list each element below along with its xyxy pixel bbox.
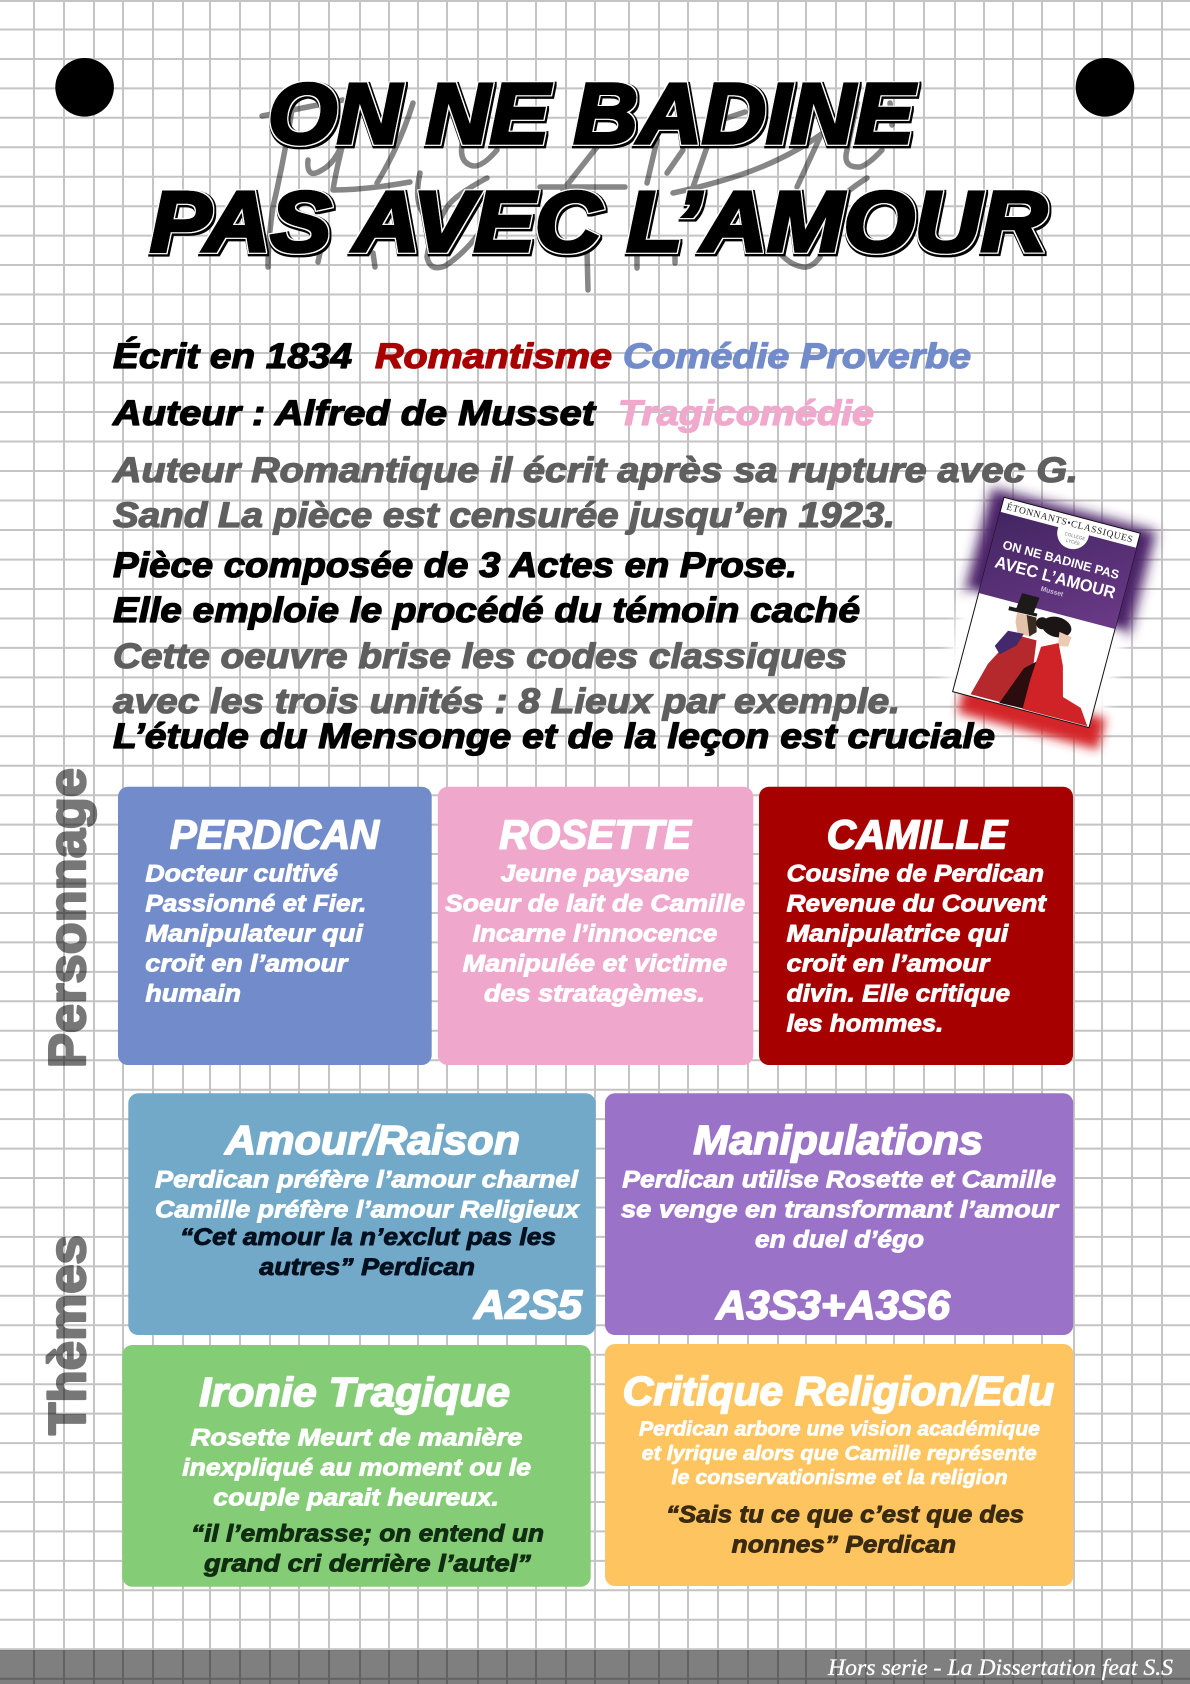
classical codes text: Cette oeuvre brise les codes classiques <box>113 637 847 676</box>
description <box>639 1419 1040 1489</box>
book cover image: ON NE BADINE PAS <box>1001 538 1121 582</box>
info text block <box>112 337 1078 756</box>
quote: grand cri derrière l’autel” <box>203 1551 531 1578</box>
heading: Ironie Tragique <box>199 1369 510 1415</box>
description: Soeur de lait de Camille <box>445 891 745 918</box>
description <box>621 1166 1060 1253</box>
book cover image: COLLÈGE <box>1064 530 1086 541</box>
title: PAS AVEC L’AMOUR <box>150 175 1047 270</box>
description: des stratagèmes. <box>484 981 705 1008</box>
description: Docteur cultivé <box>145 861 338 888</box>
description: Manipulée et victime <box>463 951 727 978</box>
description: Jeune paysane <box>501 861 689 888</box>
description: Incarne l’innocence <box>473 921 717 948</box>
description: croit en l’amour <box>787 951 991 978</box>
book cover image <box>934 488 1156 750</box>
footer band <box>0 1650 1190 1684</box>
date and movement line: Romantisme <box>375 337 612 376</box>
structure text: Pièce composée de 3 Actes en Prose. <box>113 546 797 585</box>
description: Passionné et Fier. <box>145 891 366 918</box>
heading: PERDICAN <box>170 811 380 857</box>
panel: Amour/Raison <box>128 1093 596 1335</box>
description: Camille préfère l’amour Religieux <box>155 1196 581 1223</box>
icon: right binder hole <box>1076 58 1134 117</box>
description: Perdican préfère l’amour charnel <box>155 1166 580 1193</box>
quote: autres” Perdican <box>259 1254 475 1281</box>
classical codes text: avec les trois unités : 8 Lieux par exemple. <box>113 682 900 721</box>
description: le conservationisme et la religion <box>672 1467 1008 1489</box>
author and genre line: Auteur : Alfred de Musset <box>112 394 597 433</box>
book cover image: Musset <box>1040 586 1064 599</box>
classical codes text <box>113 637 900 721</box>
description: couple parait heureux. <box>213 1485 499 1512</box>
quote: “Cet amour la n’exclut pas les <box>180 1224 556 1251</box>
quote: nonnes” Perdican <box>732 1532 956 1559</box>
icon: left binder hole <box>55 58 114 117</box>
author and genre line: Tragicomédie <box>618 394 874 433</box>
description: inexpliqué au moment ou le <box>182 1455 531 1482</box>
panel: Critique Religion/Edu <box>605 1344 1073 1586</box>
biography text: Sand La pièce est censurée jusqu’en 1923. <box>113 496 895 535</box>
description: Cousine de Perdican <box>787 861 1044 888</box>
footer credit: Hors serie - La Dissertation feat S.S <box>827 1655 1174 1680</box>
biography text: Auteur Romantique il écrit après sa rupture avec G. <box>112 451 1078 490</box>
heading: Amour/Raison <box>224 1117 520 1163</box>
description: Perdican arbore une vision académique <box>639 1419 1040 1441</box>
structure text: Elle emploie le procédé du témoin caché <box>113 591 860 630</box>
panel: Perdican <box>118 787 432 1065</box>
quote <box>191 1521 544 1578</box>
book cover image: LYCÉE <box>1065 537 1081 546</box>
date and movement line: Comédie Proverbe <box>623 337 971 376</box>
description: en duel d’égo <box>755 1226 924 1253</box>
panel: Camille <box>759 787 1073 1065</box>
description <box>145 861 366 1008</box>
title: ON NE BADINE <box>268 67 916 162</box>
description <box>182 1425 531 1512</box>
description: humain <box>145 981 241 1008</box>
description <box>155 1166 581 1223</box>
description <box>787 861 1047 1038</box>
description: les hommes. <box>787 1011 943 1038</box>
signature scribble behind title <box>262 100 892 290</box>
side heading: Thèmes: Thèmes <box>39 1235 97 1435</box>
heading: Manipulations <box>693 1117 983 1163</box>
biography text <box>112 451 1078 535</box>
structure text <box>113 546 860 630</box>
description: se venge en transformant l’amour <box>621 1196 1060 1223</box>
panel: Ironie Tragique <box>122 1345 591 1587</box>
author and genre line <box>112 394 874 433</box>
book cover image: ÉTONNANTS•CLASSIQUES <box>1005 501 1134 545</box>
description: Manipulatrice qui <box>787 921 1010 948</box>
key study text: L’étude du Mensonge et de la leçon est cruciale <box>113 717 995 756</box>
quote <box>666 1502 1024 1559</box>
description: Revenue du Couvent <box>787 891 1047 918</box>
side heading: Personnage: Personnage <box>39 768 97 1068</box>
act reference: A2S5 <box>473 1281 583 1327</box>
date and movement line: Écrit en 1834 <box>113 337 352 376</box>
quote <box>180 1224 556 1281</box>
heading: Critique Religion/Edu <box>623 1368 1054 1414</box>
description: Manipulateur qui <box>145 921 364 948</box>
panel: Rosette <box>438 787 753 1065</box>
description: divin. Elle critique <box>787 981 1010 1008</box>
description: et lyrique alors que Camille représente <box>642 1443 1037 1465</box>
quote: “il l’embrasse; on entend un <box>191 1521 544 1548</box>
title <box>150 67 1047 270</box>
description: Rosette Meurt de manière <box>191 1425 522 1452</box>
heading: CAMILLE <box>827 811 1009 857</box>
description: croit en l’amour <box>145 951 349 978</box>
heading: ROSETTE <box>499 811 693 857</box>
date and movement line <box>113 337 971 376</box>
description: Perdican utilise Rosette et Camille <box>622 1166 1056 1193</box>
quote: “Sais tu ce que c’est que des <box>666 1502 1024 1529</box>
description <box>445 861 745 1008</box>
act reference: A3S3+A3S6 <box>715 1282 951 1328</box>
panel: Manipulations <box>605 1093 1073 1335</box>
book cover image: AVEC L’AMOUR <box>993 553 1118 603</box>
